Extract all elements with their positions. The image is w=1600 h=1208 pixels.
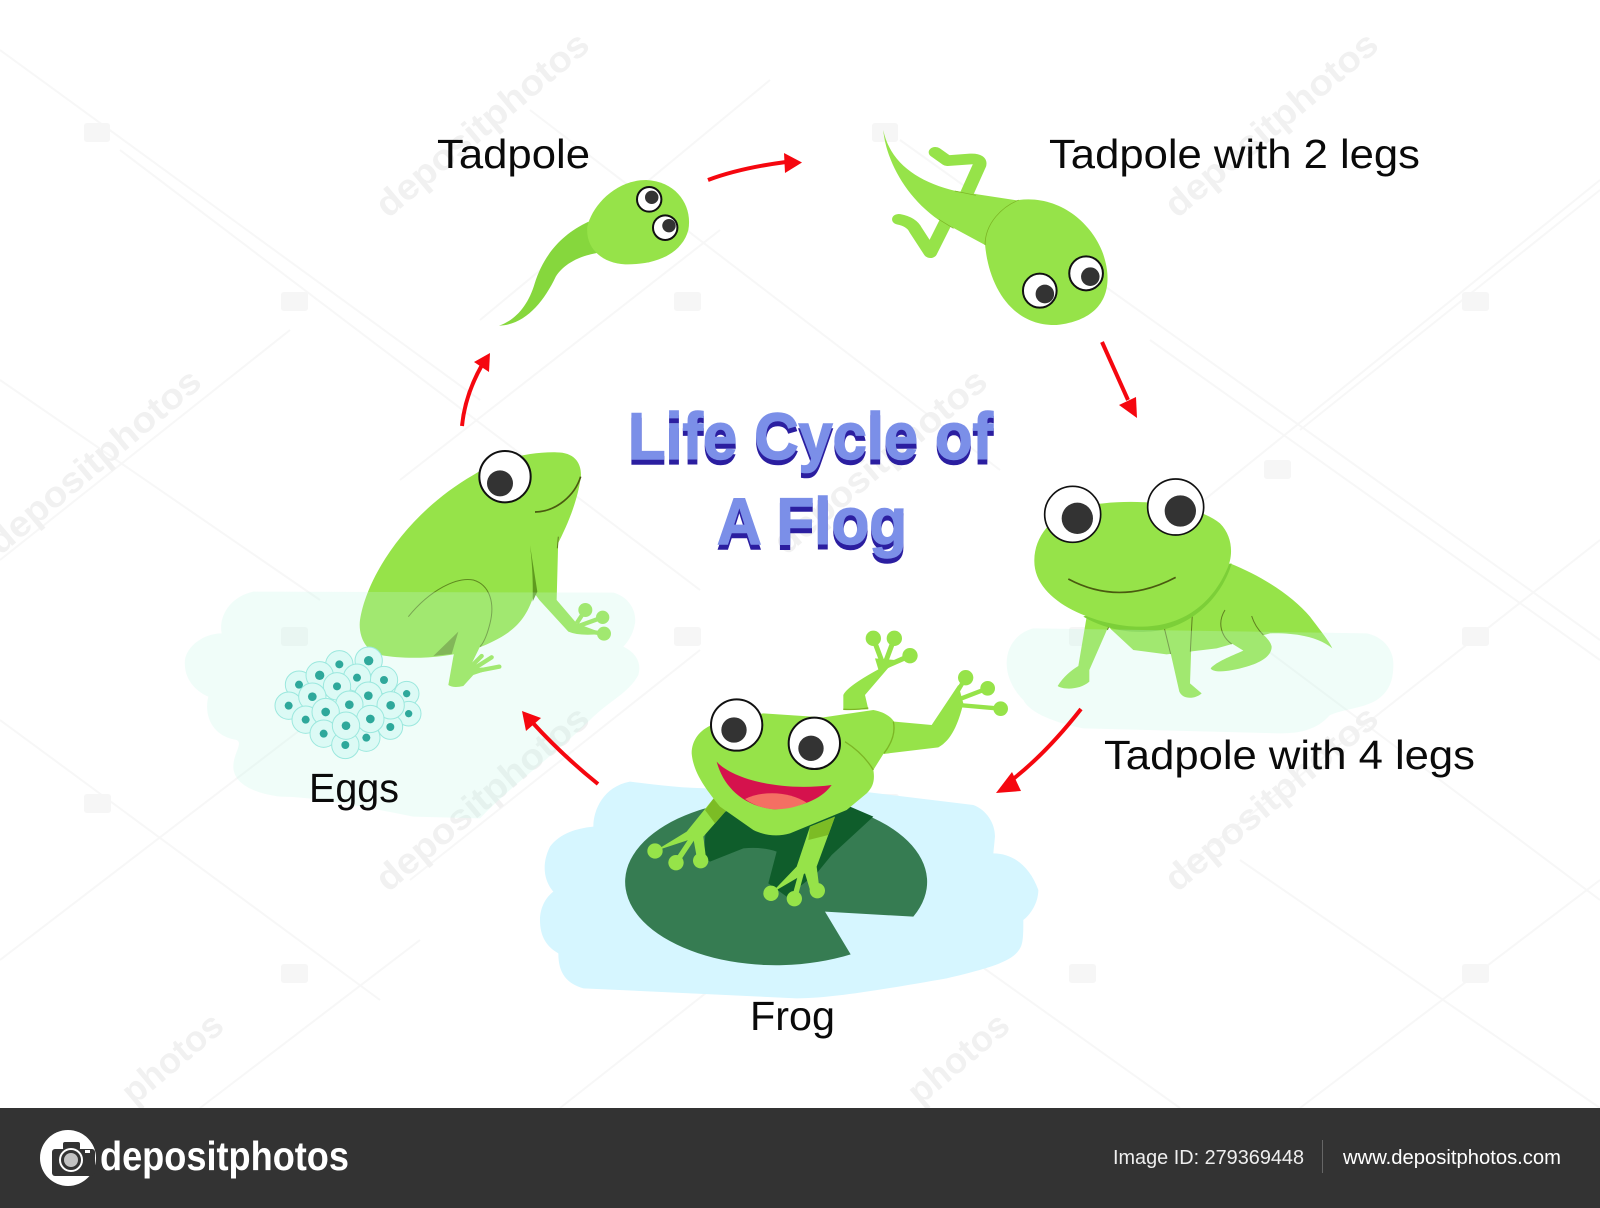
frog back leg upper: [843, 658, 895, 710]
title: A Flog: [717, 484, 907, 558]
icon: frog on lily pad: [540, 631, 1038, 998]
label: Eggs: Eggs: [309, 765, 399, 811]
arrow: frog to eggs: [522, 711, 598, 784]
label: Tadpole: Tadpole: [437, 131, 590, 177]
mouth: [717, 762, 832, 809]
label: Tadpole with 4 legs: Tadpole with 4 legs: [1104, 732, 1475, 778]
arrow: four legs to frog: [996, 709, 1081, 793]
frog front right leg: [771, 817, 835, 893]
watermark text: depositphotos: [367, 697, 597, 899]
watermark text: depositphotos: [1156, 697, 1386, 899]
front leg: [530, 537, 604, 635]
frog body: [692, 710, 895, 835]
title: A Flog: [717, 489, 907, 563]
icon: tadpole: [499, 180, 689, 326]
icon: frog eggs: [275, 647, 421, 759]
eyes: [711, 699, 762, 751]
footer bar: [0, 1108, 1600, 1208]
watermark text: depositphotos: [367, 23, 597, 225]
title: Life Cycle of: [628, 399, 994, 473]
watermark text: depositphotos: [765, 360, 995, 562]
pond behind adult frog: [185, 592, 639, 818]
arrow: adult to tadpole: [462, 353, 490, 426]
logo wordmark: depositphotos: [100, 1133, 349, 1179]
label: Tadpole with 2 legs: Tadpole with 2 legs: [1049, 131, 1420, 177]
lily pad: [625, 799, 927, 965]
title: Life Cycle of: [628, 404, 994, 478]
frog back leg lower: [883, 685, 963, 754]
frog body: [360, 452, 581, 658]
icon: tadpole with 4 legs: [1034, 479, 1332, 698]
arrow: two legs to four legs: [1102, 342, 1137, 418]
pond behind tadpole with 4 legs: [1007, 628, 1393, 733]
watermark text: depositphotos: [1156, 23, 1386, 225]
pond: [540, 782, 1038, 998]
title: [628, 399, 994, 563]
watermark text: photos: [113, 1004, 231, 1112]
label: Frog: Frog: [750, 993, 835, 1039]
icon: adult frog with eggs in pond: [360, 451, 611, 687]
frog front left leg: [655, 797, 727, 863]
arrow: tadpole to two legs: [708, 153, 802, 180]
logo icon: [40, 1130, 96, 1186]
icon: tadpole with 2 legs: [883, 130, 1108, 325]
frog shadow: [703, 807, 873, 897]
website: www.depositphotos.com: [1342, 1147, 1561, 1169]
watermark text: [0, 23, 1386, 1112]
back leg: [433, 632, 458, 656]
image id: Image ID: 279369448: [1113, 1147, 1304, 1169]
watermark text: photos: [899, 1004, 1017, 1112]
